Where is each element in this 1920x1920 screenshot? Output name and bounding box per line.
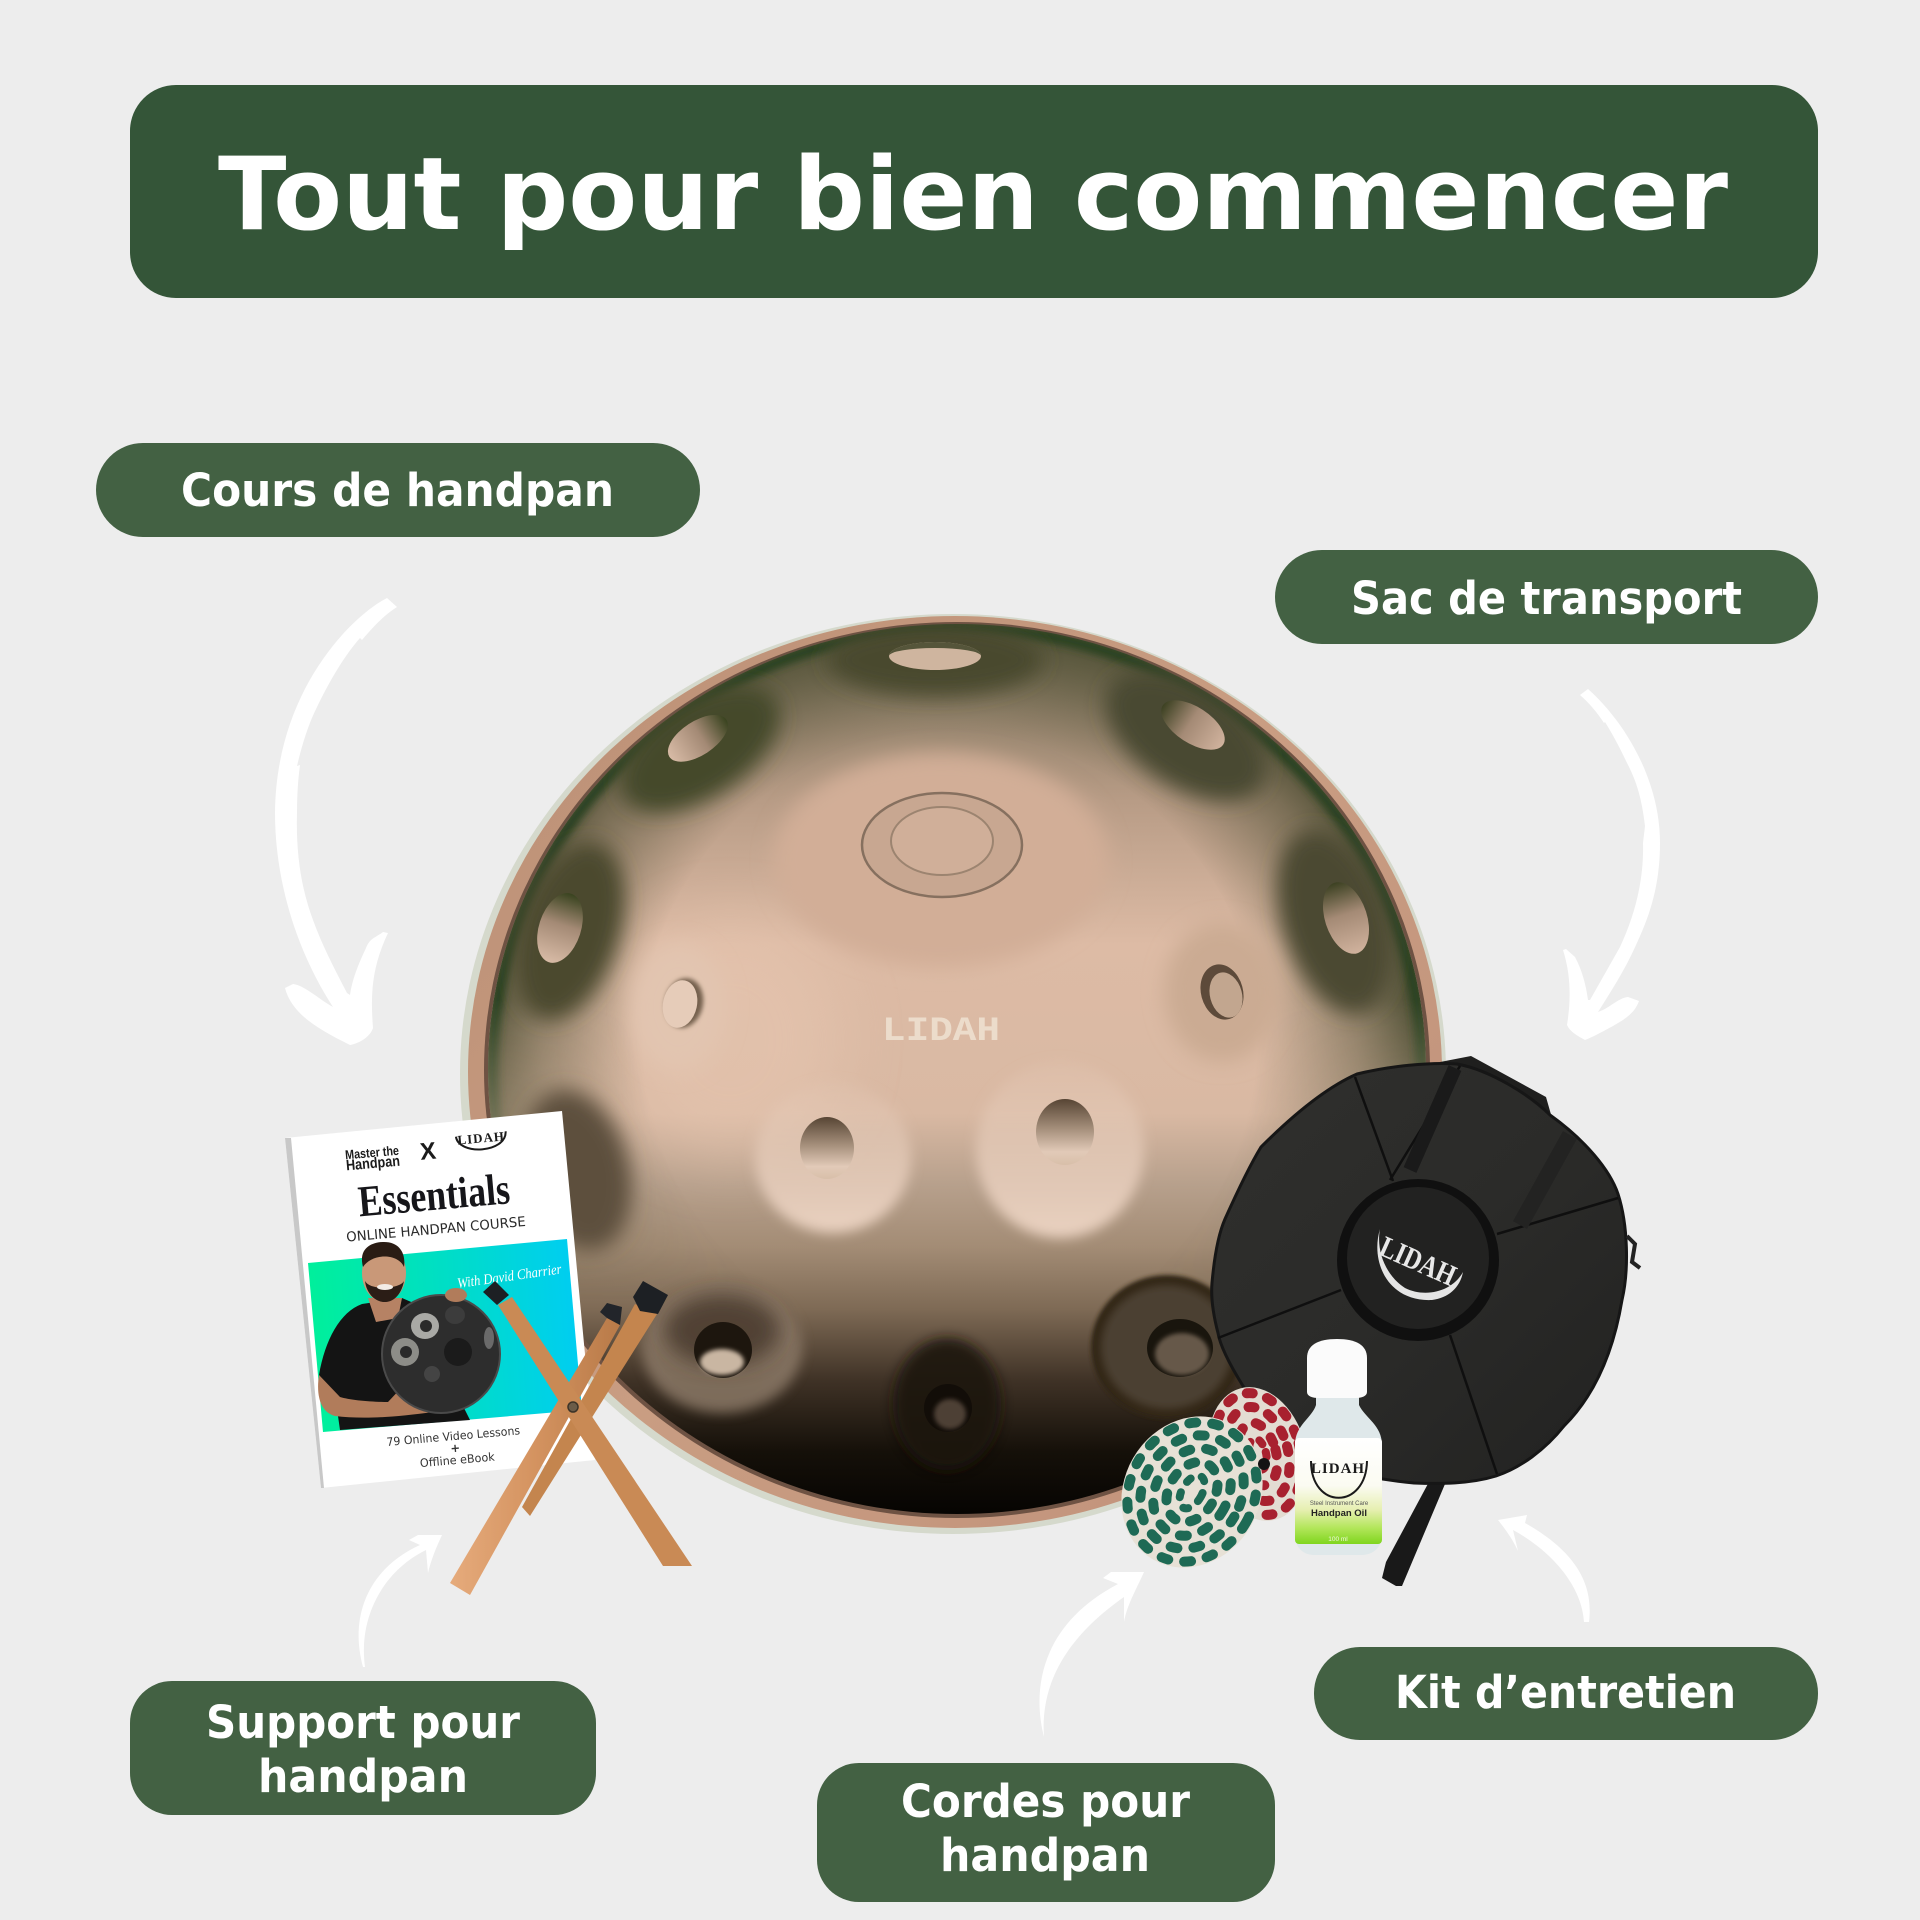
title banner [130, 85, 1818, 298]
presenter with handpan [318, 1242, 500, 1430]
note: mid right [1163, 925, 1269, 1062]
perimeter note: lower left hidden [520, 1078, 644, 1260]
collaboration X: X [419, 1138, 437, 1166]
label: Support pour handpan: Support pour [206, 1696, 521, 1749]
note: mid left [628, 964, 706, 1030]
label swoosh [1311, 1461, 1367, 1498]
centre plate [1337, 1179, 1499, 1341]
perimeter note: top [827, 624, 1043, 696]
perimeter note: upper left [614, 684, 789, 826]
handpan outer rim [460, 614, 1446, 1534]
front leg [498, 1297, 692, 1566]
book page [285, 1111, 595, 1488]
brand: Master the Handpan [344, 1143, 401, 1174]
bag strap [1382, 1480, 1445, 1586]
brand: LIDAH logo: LIDAH [457, 1128, 506, 1148]
warm glow on the surface [685, 1118, 756, 1160]
note: bottom left [642, 1283, 802, 1413]
hair [362, 1242, 404, 1267]
left leg [450, 1318, 620, 1595]
front leg cap [483, 1281, 509, 1305]
face [362, 1244, 406, 1302]
bag panel seams [1218, 1066, 1618, 1474]
label: Cours de handpan [96, 443, 700, 537]
wooden handpan stand [450, 1281, 692, 1595]
bottle cap [1307, 1339, 1367, 1398]
central shoulder dome [773, 752, 1109, 968]
handpan [460, 614, 1446, 1534]
arrow: to stand [359, 1535, 442, 1667]
handpan copper rim [468, 616, 1442, 1528]
bottle body [1295, 1395, 1382, 1555]
red cord [1194, 1376, 1322, 1532]
label: Cordes pour handpan [817, 1763, 1275, 1902]
bag logo: LIDAH [1375, 1230, 1461, 1293]
back leg cap [633, 1281, 668, 1314]
smile [377, 1284, 393, 1290]
course details: 79 Online Video Lessons [386, 1423, 521, 1449]
book title: Essentials [356, 1164, 512, 1226]
shirt [319, 1298, 470, 1430]
brand: Master the Handpan: Handpan [345, 1153, 401, 1174]
label: Sac de transport [1275, 550, 1818, 644]
handpan oil bottle [1295, 1339, 1382, 1555]
label: Cordes pour handpan: handpan [940, 1829, 1150, 1882]
green cord [1094, 1390, 1290, 1594]
arrow: to bag [1563, 689, 1660, 1040]
zipper pull [1627, 1236, 1640, 1268]
perimeter note: right [1264, 823, 1394, 1024]
vignette of the shell [488, 624, 1426, 1264]
note: centre right [976, 1062, 1144, 1238]
title banner: Tout pour bien commencer [218, 135, 1728, 253]
label brand: LIDAH [1311, 1461, 1365, 1477]
bottle label [1295, 1438, 1382, 1544]
label: Support pour handpan: handpan [258, 1750, 468, 1803]
book subtitle: ONLINE HANDPAN COURSE [346, 1214, 526, 1246]
signature: With David Charrier [456, 1261, 563, 1292]
left leg cap [600, 1303, 622, 1325]
label volume: 100 ml [1328, 1536, 1348, 1543]
arrow: to cords [1040, 1572, 1144, 1737]
course details: + [450, 1441, 461, 1455]
LIDAH engraved brand: LIDAH [882, 1013, 1000, 1051]
course details [386, 1423, 523, 1473]
handle [1440, 1056, 1552, 1118]
forearm [318, 1375, 436, 1418]
online course book [285, 1111, 595, 1488]
perimeter note: upper right [1098, 668, 1272, 812]
back leg [522, 1304, 657, 1516]
handpan cords [1094, 1376, 1322, 1594]
label: Sac de transport: Sac de transport [1351, 572, 1742, 625]
mini handpan [382, 1295, 500, 1413]
handpan rim groove [484, 622, 1430, 1518]
top ding [862, 793, 1022, 897]
bolt [568, 1402, 578, 1412]
cord lock [1258, 1458, 1270, 1470]
label: Kit d'entretien: Kit d’entretien [1395, 1666, 1736, 1719]
beard [365, 1281, 404, 1302]
neck [368, 1298, 402, 1322]
brand: Master the Handpan: Master the [344, 1143, 400, 1162]
label: Cordes pour handpan: Cordes pour [901, 1775, 1191, 1828]
label product name: Handpan Oil [1311, 1508, 1367, 1519]
note: centre left [755, 1083, 911, 1233]
label: Kit d'entretien [1314, 1647, 1818, 1740]
label caption: Steel Instrument Care [1310, 1501, 1369, 1507]
bag body [1212, 1063, 1627, 1483]
arrow: to care kit [1498, 1515, 1590, 1622]
note: bottom centre [893, 1338, 1001, 1470]
label: Support pour handpan [130, 1681, 596, 1815]
hands [445, 1288, 467, 1302]
carrying bag [1212, 1056, 1640, 1586]
book spine [285, 1138, 324, 1488]
arrow: to course [275, 598, 397, 1045]
note: bottom right [1091, 1275, 1243, 1419]
course details: Offline eBook [419, 1450, 496, 1470]
label: Cours de handpan: Cours de handpan [181, 464, 614, 517]
perimeter note: left [510, 834, 640, 1032]
cover image panel [308, 1239, 582, 1432]
